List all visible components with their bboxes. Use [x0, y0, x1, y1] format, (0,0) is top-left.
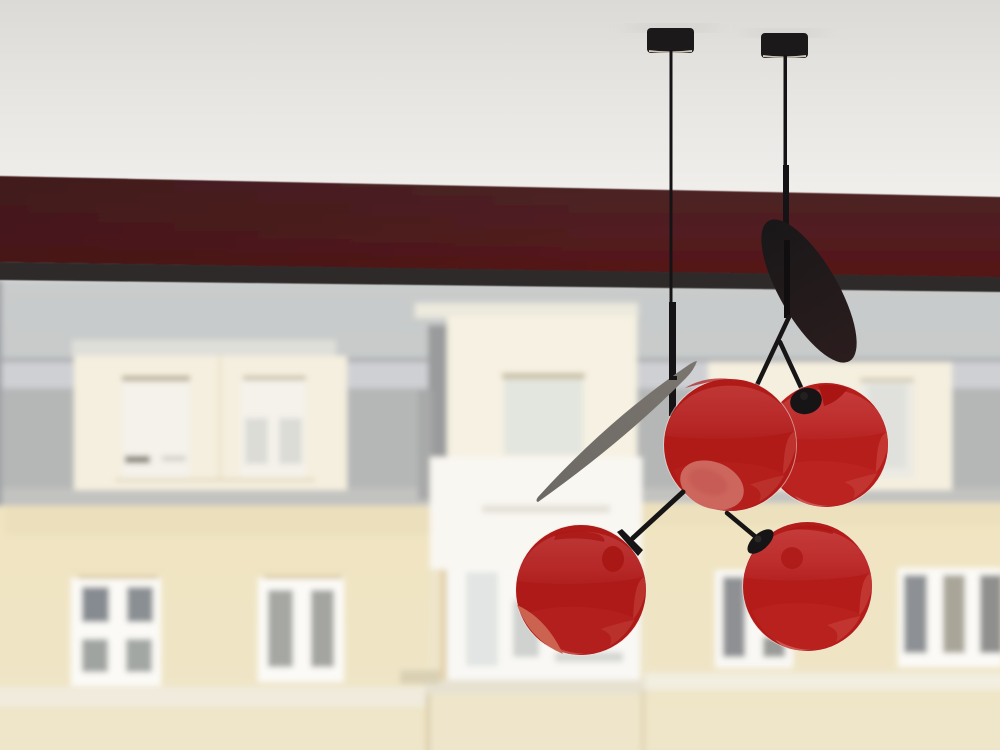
cornice: [0, 687, 430, 707]
upper forked stems: [757, 317, 805, 396]
cherry: center: [663, 378, 797, 519]
socket: lower left: [617, 529, 643, 556]
suspension rods: [669, 50, 789, 416]
lower wall: [0, 506, 440, 750]
cherry: lower left: [515, 524, 647, 656]
cherry: upper right: [763, 382, 889, 508]
far right window: [898, 568, 1000, 667]
pendant lamp: [515, 28, 889, 656]
central tower: [415, 303, 638, 466]
grey shadow beside tower: [428, 325, 448, 500]
thin tilted plate: [536, 361, 697, 502]
beam: [0, 176, 1000, 292]
right dormer: [708, 362, 952, 490]
lower left window 1: [71, 575, 161, 686]
lower left window 2: [258, 575, 344, 682]
lower arms: [633, 492, 757, 538]
upper roof: [0, 280, 1000, 510]
central lower window: [440, 568, 640, 682]
cherry: lower right: [742, 521, 873, 652]
ceiling: [0, 0, 1000, 200]
upper round plate: [743, 206, 875, 376]
balcony: [430, 457, 642, 569]
socket: upper right: [787, 384, 825, 418]
blurred building background: [0, 280, 1000, 750]
rod over plate: [784, 240, 790, 318]
socket: lower right: [743, 525, 778, 558]
right lower window: [715, 570, 793, 668]
left dormer: [72, 340, 347, 490]
ceiling canopies: [647, 28, 808, 58]
